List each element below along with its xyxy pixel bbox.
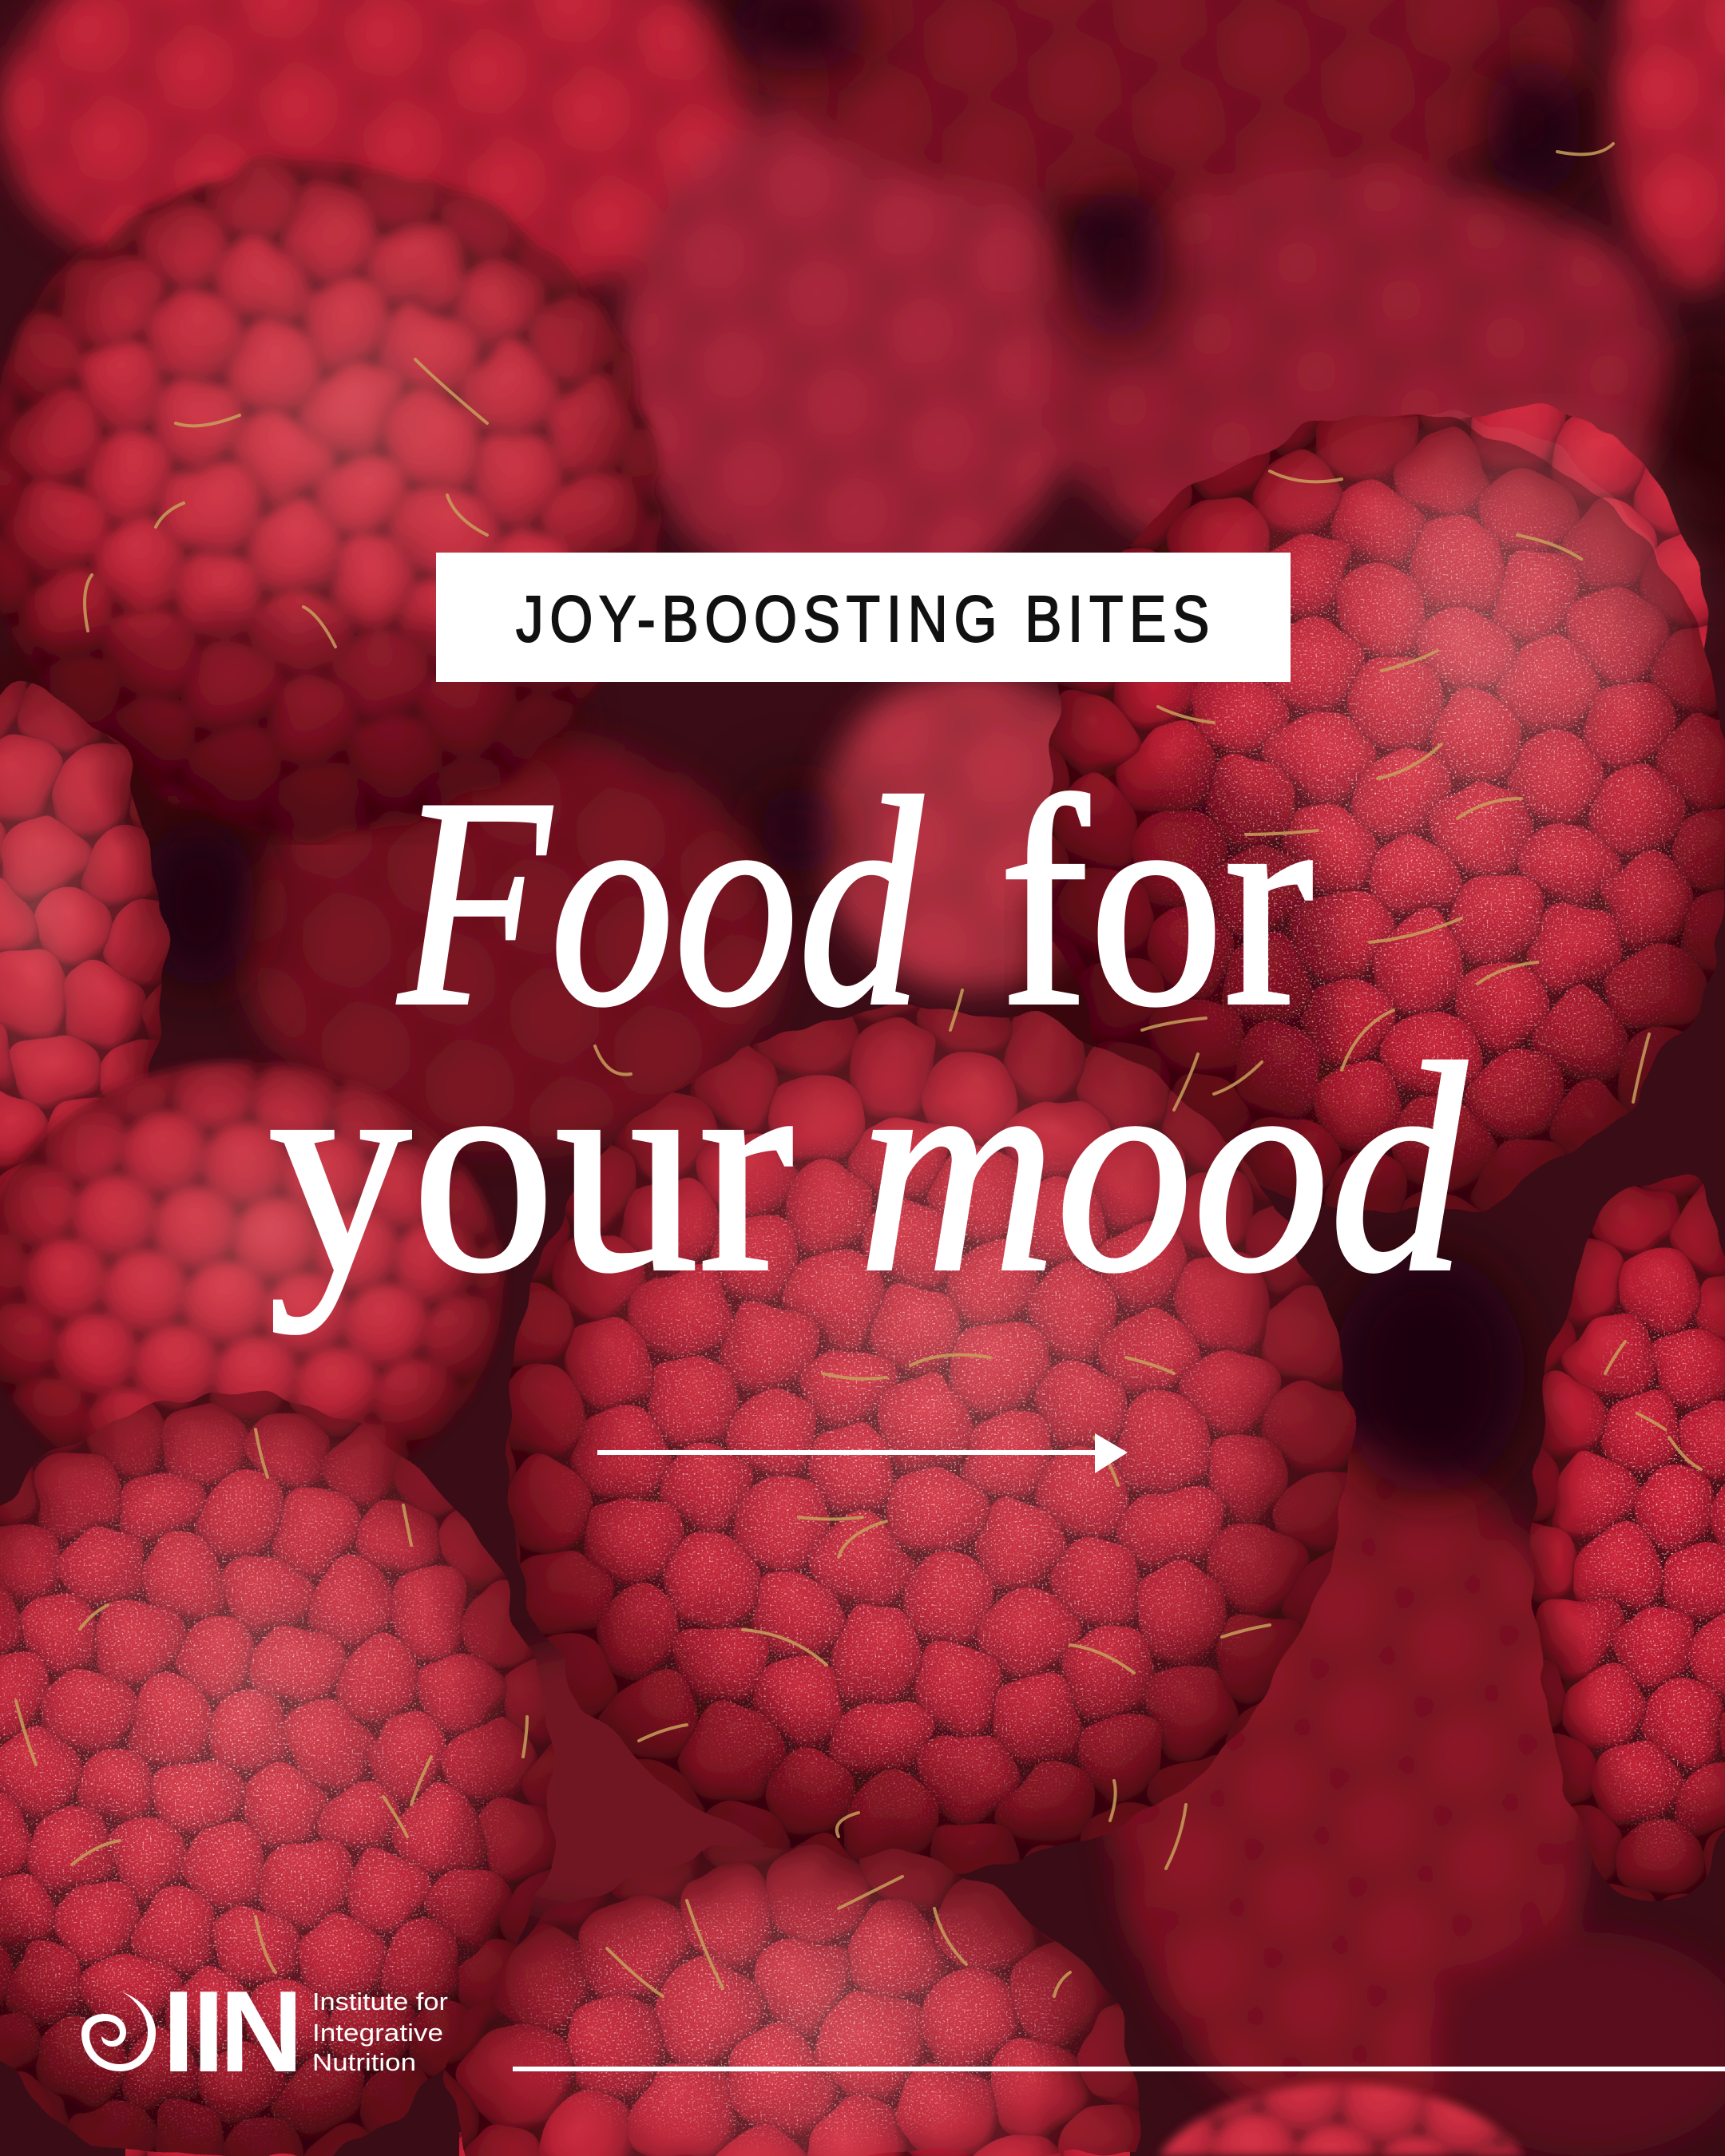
footer rule: [513, 2067, 1725, 2071]
sugar speckle on berries: [0, 463, 1725, 2153]
logo letters: IIN: IIN: [163, 1967, 303, 2096]
logo wordmark: Institute for: [312, 1988, 448, 2015]
berry: right large: [1022, 411, 1725, 1214]
logo wordmark: Nutrition: [312, 2048, 416, 2076]
berry: right edge lower: [1533, 1174, 1725, 1908]
berry: bottom left: [0, 1393, 551, 2156]
arrow: [597, 1433, 1128, 1473]
title: mood: [859, 1003, 1470, 1334]
berry: mid left: [0, 1062, 503, 1509]
title: Food: [395, 737, 926, 1068]
dark gaps between berries: [144, 0, 1725, 1493]
eyebrow label: JOY-BOOSTING BITES: [516, 583, 1215, 656]
title: your: [268, 1003, 794, 1334]
icon: spiral: [81, 1992, 156, 2071]
berry: centre: [506, 1006, 1344, 1877]
logo wordmark: Integrative: [312, 2019, 443, 2047]
logo: Institute for Integrative Nutrition: [81, 1967, 448, 2096]
berry: bottom right: [1159, 2084, 1525, 2156]
berry: left edge: [0, 690, 163, 1249]
eyebrow label: [436, 553, 1291, 682]
title: [268, 737, 1470, 1334]
berry: bottom centre: [451, 1845, 1138, 2156]
berry: upper left: [0, 160, 659, 830]
title: for: [999, 737, 1314, 1068]
logo wordmark: [312, 1988, 448, 2076]
